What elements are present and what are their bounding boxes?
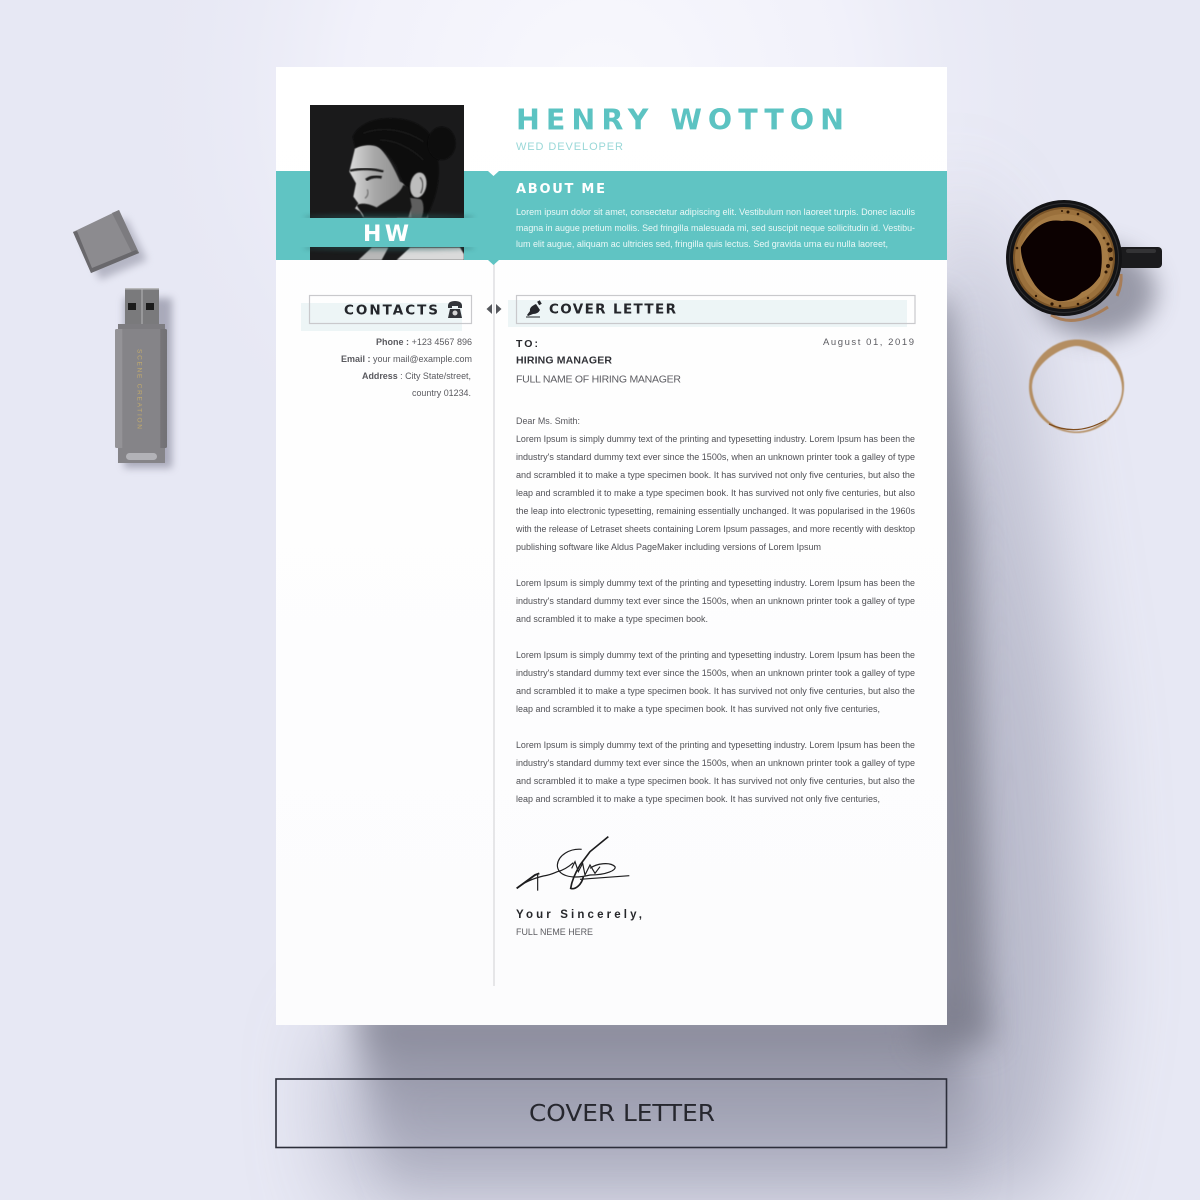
vertical divider <box>493 261 495 986</box>
icon: pen nib <box>526 300 542 318</box>
name heading: HENRY WOTTON <box>516 104 844 136</box>
letter body: and scrambled it to make a type specimen book. It has survived not only five centuries, but also the <box>516 470 915 480</box>
letter body: publishing software like Aldus PageMaker including versions of Lorem Ipsum <box>516 542 821 552</box>
contacts heading: CONTACTS <box>344 302 438 318</box>
resume sheet <box>276 67 947 1025</box>
letter body: Lorem Ipsum is simply dummy text of the printing and typesetting industry. Lorem Ipsum has been the <box>516 740 915 750</box>
neck <box>397 198 428 218</box>
teal about band <box>276 171 947 265</box>
letter body: industry's standard dummy text ever since the 1500s, when an unknown printer took a galley of type <box>516 758 915 768</box>
cover letter heading <box>508 296 915 327</box>
date: August 01, 2019 <box>823 337 914 348</box>
contact details: Email : your mail@example.com <box>341 354 472 365</box>
coffee stain under mug <box>1051 274 1121 320</box>
contact details: Phone : +123 4567 896 <box>376 337 472 348</box>
usb drive cap <box>73 210 147 280</box>
portrait photo <box>310 105 464 261</box>
signature <box>517 837 629 891</box>
letter body: the leap into electronic typesetting, remaining essentially unchanged. It was popularised in the 1960s <box>516 506 915 516</box>
icon: telephone <box>448 301 462 318</box>
initials ribbon: HW <box>363 222 409 247</box>
letter body: and scrambled it to make a type specimen book. It has survived not only five centuries, but also the <box>516 686 915 696</box>
recipient block: HIRING MANAGER <box>516 354 612 366</box>
contacts heading <box>301 296 472 331</box>
recipient block <box>516 338 681 386</box>
shirt <box>358 248 388 260</box>
job title: WED DEVELOPER <box>516 141 623 153</box>
initials ribbon <box>296 218 482 247</box>
ribbon shadows <box>303 214 475 250</box>
recipient block: FULL NAME OF HIRING MANAGER <box>516 374 681 386</box>
coffee mug <box>1006 200 1162 316</box>
contact details <box>341 337 472 399</box>
letter body: leap and scrambled it to make a type specimen book. It has survived not only five centuries, <box>516 704 880 714</box>
letter body: industry's standard dummy text ever since the 1500s, when an unknown printer took a galley of type <box>516 668 915 678</box>
letter body: Dear Ms. Smith: <box>516 416 580 427</box>
letter body: and scrambled it to make a type specimen book. <box>516 614 708 624</box>
about me: Lorem ipsum dolor sit amet, consectetur adipiscing elit. Vestibulum non laoreet turpis. Donec iaculis <box>516 207 915 218</box>
coffee mug shadow <box>1036 246 1156 338</box>
contact details: country 01234. <box>412 388 471 399</box>
about me: ABOUT ME <box>516 182 605 197</box>
about me <box>516 182 915 250</box>
recipient block: TO: <box>516 338 538 350</box>
letter body: Lorem Ipsum is simply dummy text of the printing and typesetting industry. Lorem Ipsum has been the <box>516 650 915 660</box>
cover letter heading: COVER LETTER <box>549 302 677 318</box>
coffee ring stain <box>1029 340 1124 433</box>
letter body: and scrambled it to make a type specimen book. It has survived not only five centuries, but also the <box>516 776 915 786</box>
letter body <box>515 416 915 804</box>
about me: lum elit augue, aliquam ac ultricies sed, fringilla quis lectus. Sed gravida urna eu nulla laoreet, <box>516 239 888 250</box>
closing: FULL NEME HERE <box>516 927 593 938</box>
closing <box>516 909 642 938</box>
letter body: Lorem Ipsum is simply dummy text of the printing and typesetting industry. Lorem Ipsum has been the <box>516 434 915 444</box>
beard <box>357 185 412 217</box>
caption box <box>276 1079 946 1148</box>
paper shadow <box>335 170 1085 1200</box>
skin <box>349 145 412 217</box>
caption box: COVER LETTER <box>529 1101 715 1127</box>
ear <box>409 172 428 198</box>
letter body: leap and scrambled it to make a type specimen book. It has survived not only five centuries, <box>516 794 880 804</box>
hair bun <box>428 127 456 160</box>
contact details: Address : City State/street, <box>362 371 471 382</box>
usb drive <box>115 288 172 468</box>
closing: Your Sincerely, <box>516 909 642 921</box>
usb label: SCENE CREATION <box>136 349 142 429</box>
brow and eye <box>350 169 383 172</box>
letter body: industry's standard dummy text ever since the 1500s, when an unknown printer took a galley of type <box>516 452 915 462</box>
letter body: Lorem Ipsum is simply dummy text of the printing and typesetting industry. Lorem Ipsum has been the <box>516 578 915 588</box>
about me: magna in augue pretium mollis. Sed fringilla malesuada mi, sed suscipit neque sollicitudin id. Vestibu- <box>516 223 915 234</box>
foam bubbles <box>1016 210 1113 307</box>
letter body: industry's standard dummy text ever since the 1500s, when an unknown printer took a galley of type <box>516 596 915 606</box>
letter body: leap and scrambled it to make a type specimen book. It has survived not only five centuries, but also <box>516 488 915 498</box>
letter body: with the release of Letraset sheets containing Lorem Ipsum passages, and more recently with desktop <box>515 524 915 534</box>
hair <box>353 118 439 217</box>
paper <box>276 67 947 1025</box>
arrows on divider <box>486 304 502 314</box>
